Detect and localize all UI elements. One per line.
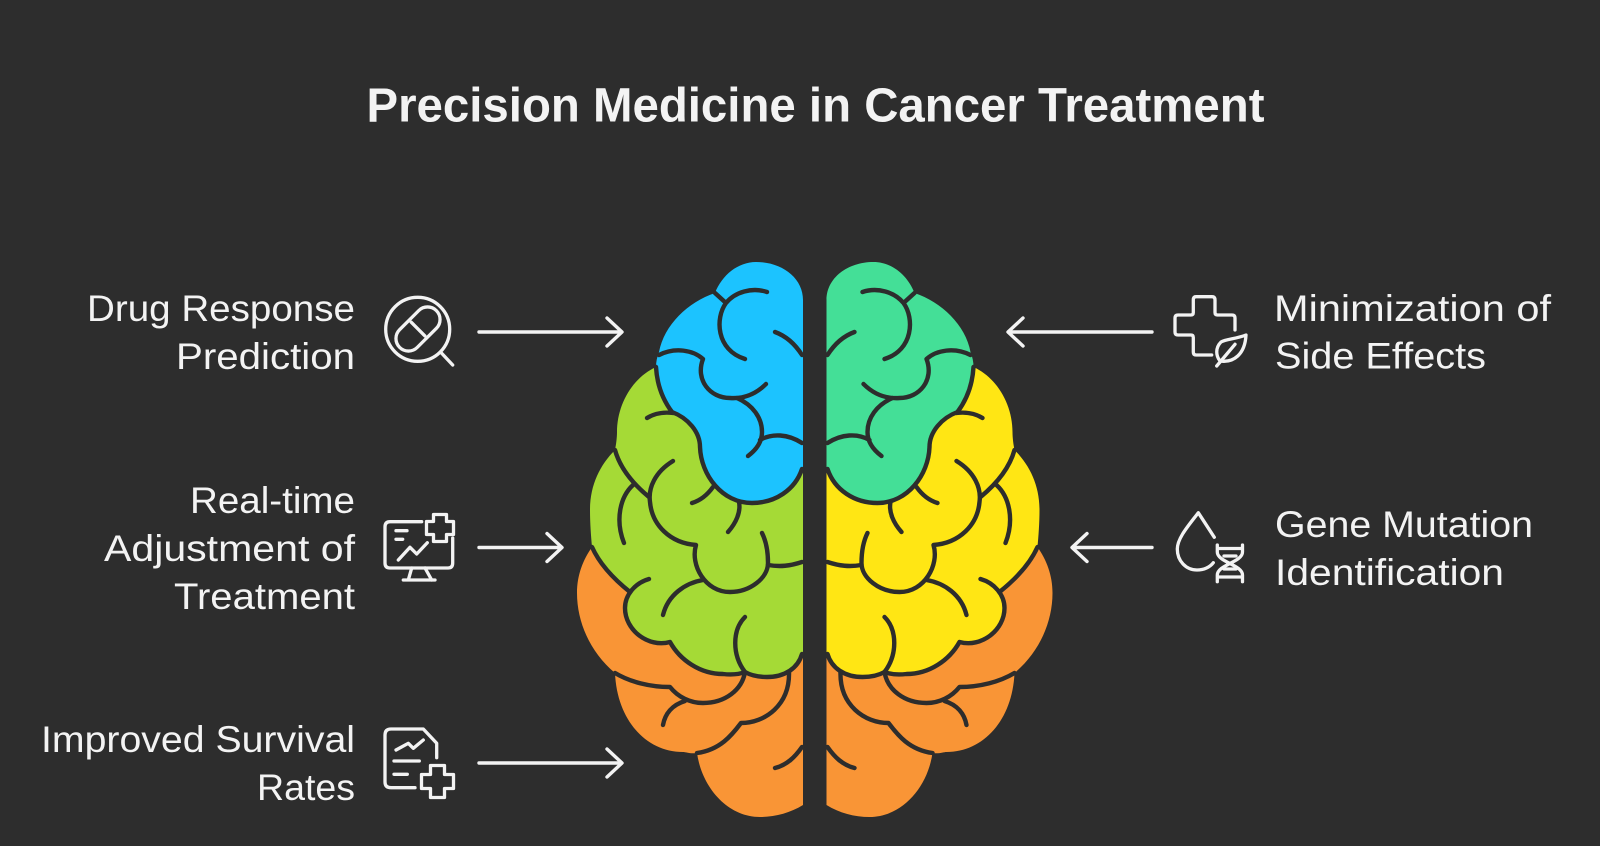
brain: left hemisphere [577,262,803,817]
label: Drug Response Prediction: Prediction [176,335,355,377]
lobe: orange right [826,547,1052,817]
icon: medical cross with leaf [1175,297,1246,366]
arrow: drug response to brain [479,318,622,346]
label: Drug Response Prediction: Drug Response [87,287,355,329]
folds: right hemisphere [828,290,1038,768]
lobe: teal right [826,262,974,503]
label: Real-time Adjustment of Treatment [104,479,356,617]
label: Drug Response Prediction [87,287,355,377]
icon: monitor with chart and plus [385,514,454,580]
label: Improved Survival Rates: Improved Survival [41,718,355,760]
folds: left hemisphere [592,290,802,768]
icon: report with plus [385,729,454,798]
icon: drop with DNA helix [1177,513,1242,582]
brain: right hemisphere [826,262,1052,817]
lobe: blue left [656,262,803,503]
label: Real-time Adjustment of Treatment: Adjustment of [104,527,356,569]
icon: pill under magnifying glass [386,297,453,365]
arrow: improved survival to brain [479,749,622,777]
arrow: real-time adjustment to brain [479,534,562,562]
lobe: yellow right [826,367,1040,677]
label: Improved Survival Rates: Rates [257,766,355,808]
label: Gene Mutation Identification [1275,503,1533,593]
label: Real-time Adjustment of Treatment: Treatment [174,575,356,617]
label: Gene Mutation Identification: Gene Mutation [1275,503,1533,545]
label: Minimization of Side Effects: Minimization of [1274,287,1552,329]
arrow: gene mutation identification to brain [1072,534,1152,562]
lobe: orange left [577,547,803,817]
title: Precision Medicine in Cancer Treatment [366,80,1265,132]
label: Real-time Adjustment of Treatment: Real-time [190,479,355,521]
lobe: green left [590,367,803,677]
label: Improved Survival Rates [41,718,355,808]
arrow: minimization of side effects to brain [1008,318,1152,346]
label: Minimization of Side Effects: Side Effects [1275,334,1486,376]
label: Minimization of Side Effects [1274,287,1552,376]
label: Gene Mutation Identification: Identification [1275,551,1504,593]
